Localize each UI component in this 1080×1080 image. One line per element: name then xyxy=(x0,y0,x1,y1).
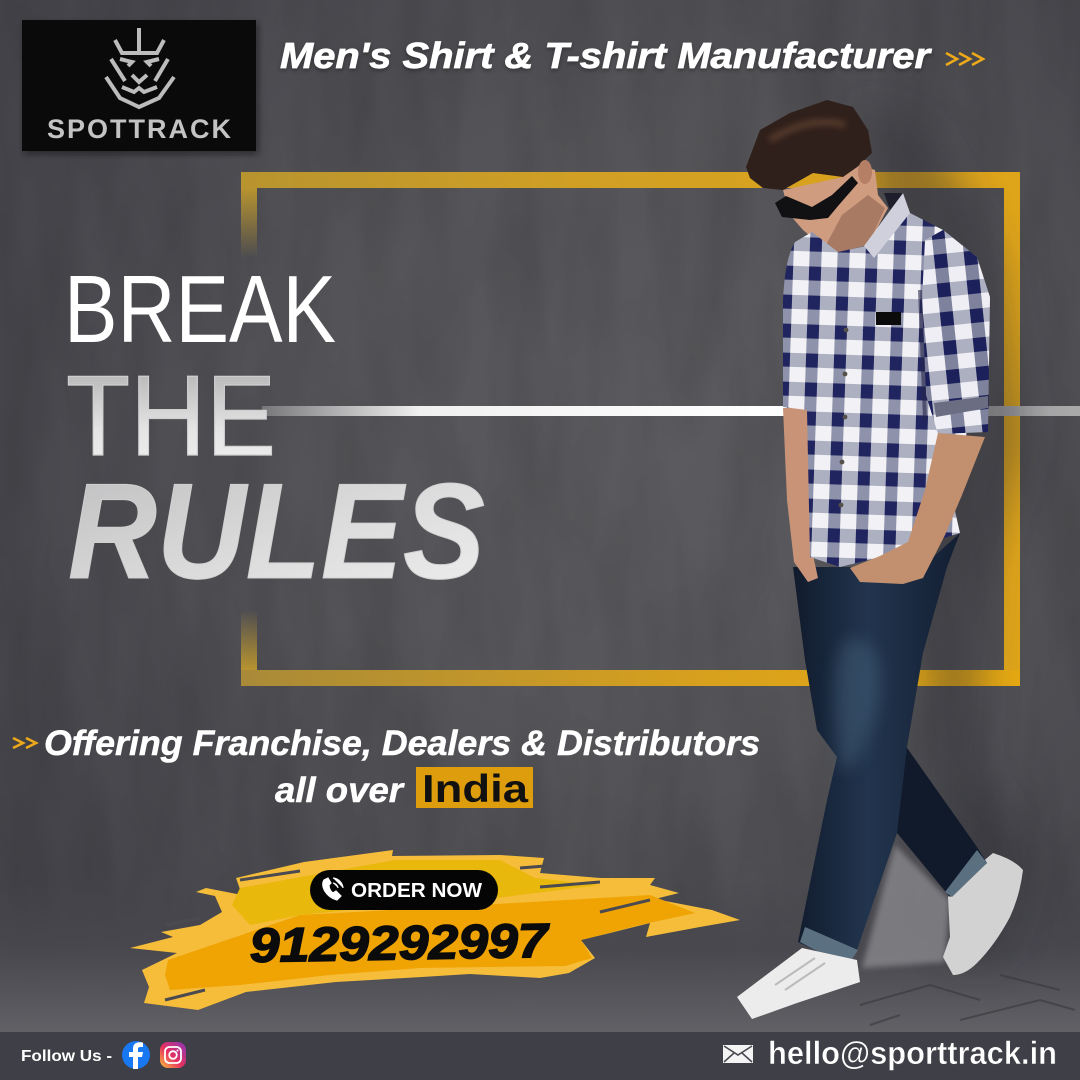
yellow brush stroke xyxy=(130,850,740,1010)
phone number: 9129292997 xyxy=(249,915,551,973)
gold frame xyxy=(241,172,1020,686)
floor wrinkles xyxy=(860,975,1075,1025)
icon: facebook xyxy=(122,1041,150,1069)
follow us label: Follow Us - xyxy=(21,1048,112,1065)
headline xyxy=(64,256,485,607)
shirt sleeve xyxy=(922,230,990,434)
shirt body xyxy=(783,195,977,567)
collar xyxy=(864,193,910,258)
offering text: all over xyxy=(275,771,405,810)
left arm xyxy=(783,408,818,582)
man figure xyxy=(737,100,1023,1019)
front leg jeans xyxy=(793,533,960,965)
logo wordmark: SPOTTRACK xyxy=(47,114,232,144)
logo box xyxy=(22,20,258,154)
icon: instagram xyxy=(160,1042,186,1068)
back leg xyxy=(870,745,987,897)
shirt badge xyxy=(876,312,901,325)
order now pill: ORDER NOW xyxy=(351,880,482,902)
hair xyxy=(746,100,872,190)
order now pill xyxy=(310,870,498,910)
footer bar xyxy=(0,1032,1080,1080)
headline: break: BREAK xyxy=(64,256,336,363)
offering text xyxy=(13,724,760,811)
wall shadow of the man xyxy=(860,100,1030,960)
icon: double chevrons xyxy=(13,738,36,748)
headline: rules: RULES xyxy=(68,455,485,607)
shirt buttons xyxy=(839,328,848,507)
icon: envelope xyxy=(723,1045,753,1063)
india highlight xyxy=(416,767,533,808)
sunglasses xyxy=(775,176,858,220)
ear xyxy=(858,160,872,184)
email address: hello@sporttrack.in xyxy=(768,1035,1057,1071)
icon: triple chevrons xyxy=(946,53,983,65)
left shoe xyxy=(737,948,860,1019)
right arm and hand xyxy=(850,433,985,584)
logo icon: crowned lion xyxy=(106,28,174,107)
offering text: India xyxy=(422,768,528,811)
headline: the: THE xyxy=(66,353,276,480)
neck and face xyxy=(783,165,888,252)
light wall patch between legs xyxy=(862,845,950,968)
right shoe xyxy=(943,853,1023,975)
horizontal white line xyxy=(262,406,1080,416)
icon: phone xyxy=(323,878,343,900)
top heading: Men's Shirt & T-shirt Manufacturer xyxy=(280,35,932,76)
offering text: Offering Franchise, Dealers & Distributors xyxy=(44,724,760,763)
